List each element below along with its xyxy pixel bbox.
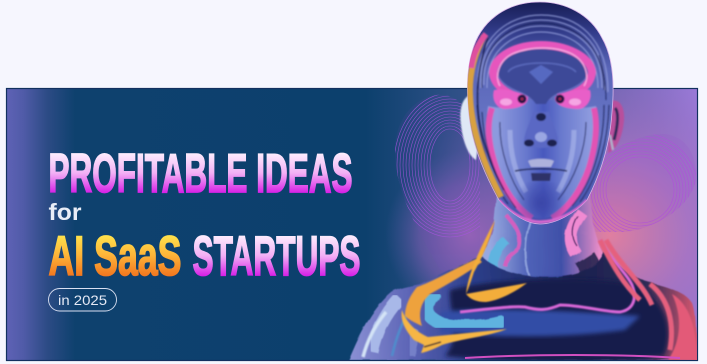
contour pattern: right: [590, 134, 696, 232]
cheek highlights: [510, 130, 574, 192]
left hair tuft: [460, 95, 482, 160]
neon forehead band: [493, 45, 592, 98]
right ear: [608, 100, 624, 153]
torso: gold flows: [402, 220, 527, 353]
neck: [468, 195, 625, 300]
torso: pink neon line: [460, 240, 634, 312]
cheek contour lines: [477, 105, 609, 208]
gold strip: [470, 36, 501, 197]
shoulders and torso: [349, 220, 697, 360]
heading line: STARTUPS: STARTUPS: [192, 224, 360, 287]
lips: [528, 159, 554, 167]
nose: [524, 112, 549, 148]
torso: mid blue band: [440, 309, 640, 336]
chin shading: [516, 184, 566, 220]
neon cheek band: [489, 108, 532, 218]
torso: blue swirl: [428, 296, 500, 326]
title text block: [48, 142, 360, 311]
badge: in 2025: in 2025: [58, 292, 107, 308]
torso: red strands: [600, 240, 672, 350]
neon eyes: [493, 89, 528, 109]
banner panel: [6, 88, 698, 360]
head: [467, 2, 613, 224]
inner forehead dome: [498, 49, 587, 104]
lower face fill: [487, 100, 597, 219]
face details: [470, 15, 609, 222]
contour pattern: left: [395, 94, 480, 238]
badge: in 2025: [48, 288, 116, 311]
torso: dark chest: [445, 279, 668, 360]
heading line: AI SaaS: AI SaaS: [48, 224, 182, 287]
figure: neon humanoid bust: [349, 2, 697, 360]
forehead contour lines: [478, 15, 608, 92]
chin neon line: [499, 200, 587, 222]
heading line: PROFITABLE IDEAS: PROFITABLE IDEAS: [48, 142, 352, 204]
heading line: for: for: [48, 199, 82, 225]
